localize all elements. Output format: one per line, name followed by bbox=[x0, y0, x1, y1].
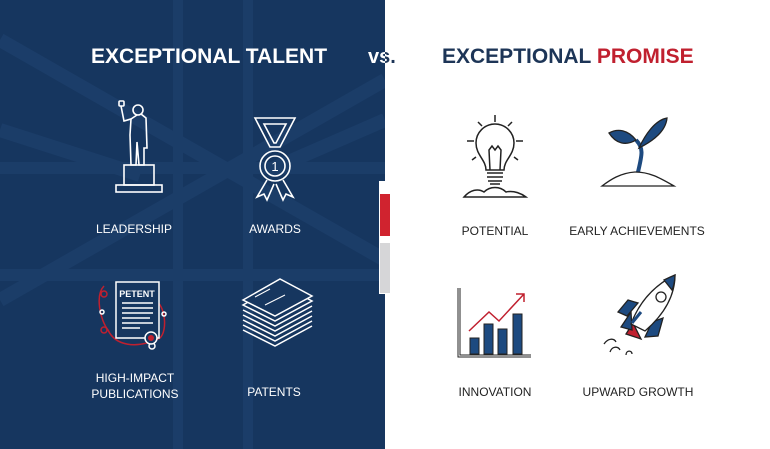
panel: left navy background bbox=[0, 0, 385, 449]
icon: leadership statue bbox=[116, 101, 162, 192]
icon: awards medal: 1 bbox=[271, 159, 279, 174]
label: awards: AWARDS bbox=[249, 222, 301, 236]
flag tab bbox=[379, 181, 390, 294]
icon: publication document: PETENT bbox=[119, 289, 155, 299]
icon: rocket bbox=[604, 275, 675, 355]
icon: innovation chart bbox=[459, 288, 531, 356]
title: exceptional promise: EXCEPTIONAL PROMISE bbox=[442, 45, 694, 68]
label: patents: PATENTS bbox=[247, 385, 301, 399]
icon: patents stack bbox=[243, 279, 312, 346]
label: early achievements: EARLY ACHIEVEMENTS bbox=[569, 224, 705, 238]
label: high-impact publications: PUBLICATIONS bbox=[91, 387, 179, 401]
icon: publication document bbox=[99, 282, 166, 349]
icon: awards medal bbox=[255, 118, 295, 200]
label: potential: POTENTIAL bbox=[462, 224, 529, 238]
vs label: vs. bbox=[368, 46, 396, 68]
icon: sprout bbox=[602, 118, 674, 186]
label: high-impact publications: HIGH-IMPACT bbox=[96, 371, 174, 385]
label: leadership: LEADERSHIP bbox=[96, 222, 172, 236]
title: exceptional talent: EXCEPTIONAL TALENT bbox=[91, 45, 327, 68]
label: innovation: INNOVATION bbox=[459, 385, 531, 399]
icon: light bulb bbox=[464, 115, 526, 197]
label: upward growth: UPWARD GROWTH bbox=[583, 385, 693, 399]
vs label: vs. bbox=[368, 46, 396, 68]
vs label bbox=[368, 52, 394, 63]
